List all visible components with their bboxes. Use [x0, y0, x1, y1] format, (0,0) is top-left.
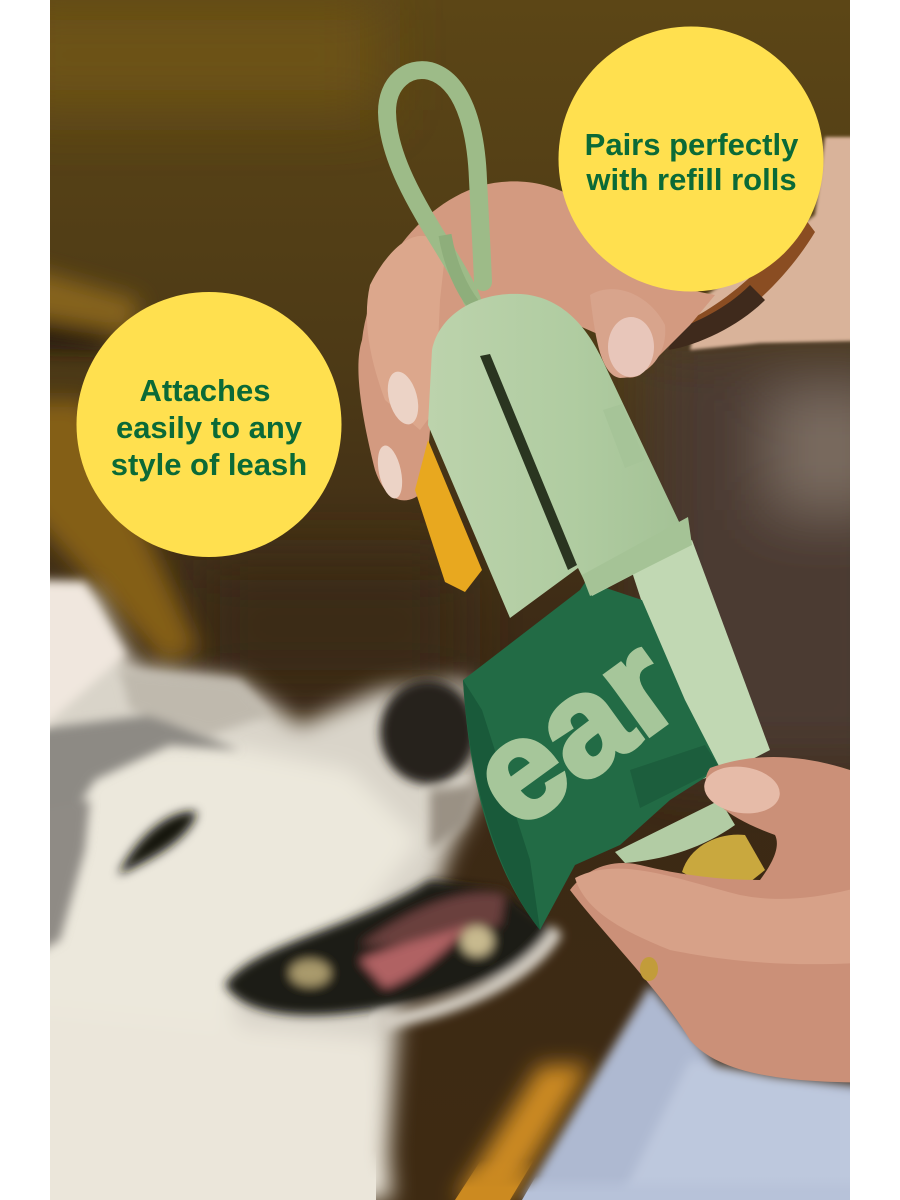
- orange stripe foot: [455, 1164, 532, 1200]
- callout: refill rolls: Pairs perfectly: [585, 127, 799, 162]
- ring: [640, 957, 658, 981]
- callout: refill rolls: with refill rolls: [585, 162, 797, 197]
- upper hand: [358, 181, 715, 501]
- callout: leash: easily to any: [116, 410, 303, 445]
- yellow bag roll behind: [415, 440, 482, 592]
- dog mouth: [225, 880, 553, 1015]
- dog eye: [118, 812, 197, 875]
- dog nose: [380, 680, 476, 784]
- blue trousers foot: [522, 1178, 850, 1200]
- thumbnail: [704, 766, 780, 814]
- bottom cap: [615, 800, 735, 863]
- dispenser: [387, 70, 770, 930]
- leash loop: [387, 70, 483, 300]
- dispenser slot: [480, 354, 577, 570]
- dog ear: [50, 573, 130, 727]
- cap collar: [582, 517, 692, 596]
- embossed logo: [603, 404, 645, 468]
- main cap: [428, 294, 690, 618]
- sliding inner tube: [632, 540, 770, 780]
- yellow roll end: [682, 835, 765, 882]
- dog chest foot: [50, 1162, 376, 1200]
- dog: [0, 580, 562, 1200]
- fingernails: [608, 317, 654, 377]
- callout: leash: style of leash: [111, 447, 307, 482]
- callout: leash: [76, 292, 342, 557]
- wrist and watch: [668, 134, 850, 352]
- green bag: [463, 575, 720, 930]
- lower hand: [570, 757, 850, 1082]
- callout: refill rolls: [558, 26, 824, 292]
- callout: leash: Attaches: [140, 373, 270, 408]
- bag lettering: ear: [441, 606, 704, 856]
